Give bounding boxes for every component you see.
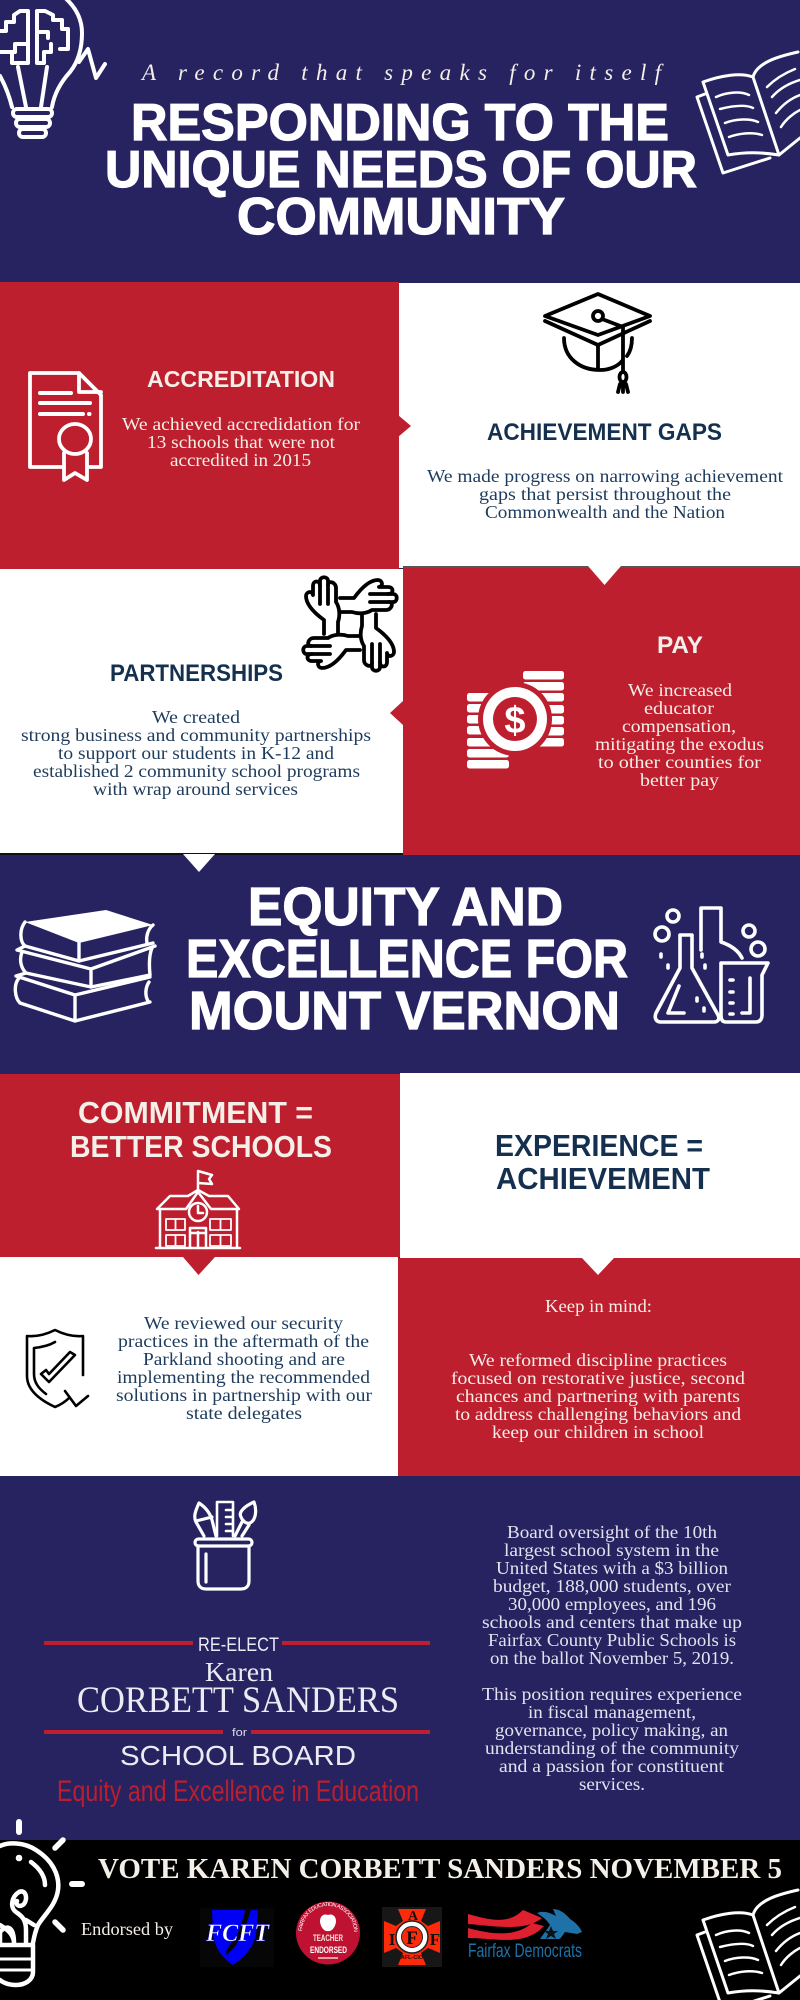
text: accreditation body: 13 schools that were not [147,432,335,452]
text: achievement gaps body [427,466,783,522]
icon: school building [156,1171,240,1248]
text: board oversight: on the ballot November 5, 2019. [490,1648,734,1668]
text: partnerships body: with wrap around services [93,779,298,799]
panel: header [0,0,800,284]
icon: open book footer [697,1890,800,2000]
text: accreditation body: accredited in 2015 [170,450,311,470]
arrow: commitment pointer [183,1257,215,1275]
text: partnerships body: strong business and community partnerships [21,725,371,745]
heading: vote banner: VOTE KAREN CORBETT SANDERS NOVEMBER 5 [98,1853,782,1885]
logo: IAFF: A [408,1909,419,1924]
text: board oversight [482,1522,742,1668]
text: board oversight: largest school system in the [504,1540,719,1560]
text: pay body [595,680,764,790]
logo: teacher endorsed: TEACHER [313,1933,343,1943]
text: board oversight: schools and centers that make up [482,1612,742,1632]
text: discipline body: keep our children in school [492,1422,704,1442]
text: discipline body [451,1350,745,1442]
icon: shield with check [27,1330,88,1407]
text: accreditation body [122,414,360,470]
icon: stack of books [15,910,155,1021]
text: partnerships body [21,707,371,799]
logo: IAFF: I [389,1930,396,1949]
heading: commitment better schools: COMMITMENT = [78,1095,313,1130]
text: pay body: educator [644,698,714,718]
icon: coins with dollar sign [467,671,564,768]
panel: partnerships [0,569,403,855]
logo: re-elect lockup: RE-ELECT [198,1635,279,1656]
logo: FCFT [200,1908,274,1967]
icon: light bulb with brain [0,0,105,137]
icon: coins with dollar sign: $ [504,700,526,742]
heading: accreditation: ACCREDITATION [147,366,335,392]
logo: teacher endorsed: FAIRFAX EDUCATION ASSOCIATION [298,1902,358,1932]
text: board oversight: Fairfax County Public Schools is [488,1630,736,1650]
text: security body: We reviewed our security [144,1313,343,1333]
logo: IAFF: F [406,1928,418,1949]
text: endorsed by: Endorsed by [81,1919,173,1939]
panel: campaign section [0,1476,800,1840]
logo: re-elect lockup: CORBETT SANDERS [77,1680,399,1721]
icon: four joined hands [303,577,397,671]
panel: experience [400,1073,800,1258]
logo: re-elect lockup: for [232,1727,247,1739]
text: partnerships body: to support our students in K-12 and [58,743,334,763]
icon: open book [697,52,800,173]
title: UNIQUE NEEDS OF OUR [105,141,697,199]
tagline: A record that speaks for itself [140,60,665,85]
heading: experience achievement [495,1128,710,1196]
text: board oversight: budget, 188,000 students, over [493,1576,731,1596]
text: security body: implementing the recommended [117,1367,370,1387]
text: security body: practices in the aftermath of the [118,1331,369,1351]
logo: teacher endorsed: ENDORSED [310,1945,347,1955]
text: security body: state delegates [186,1403,302,1423]
icon: glowing light bulb [0,1822,82,1985]
logo: IAFF: AFL-CIO [401,1955,424,1961]
panel: pay [390,566,800,856]
text: position requirements: services. [579,1774,645,1794]
arrow: experience pointer [582,1258,614,1275]
text: board oversight: 30,000 employees, and 196 [508,1594,716,1614]
text: keep in mind: Keep in mind: [545,1296,652,1316]
logo: FCFT: FCFT [205,1920,271,1947]
text: partnerships body: We created [152,707,240,727]
text: discipline body: focused on restorative justice, second [451,1368,745,1388]
heading: pay: PAY [657,632,703,659]
text: position requirements: This position requires experience [482,1684,742,1704]
text: discipline body: chances and partnering with parents [456,1386,740,1406]
panel: achievement gaps [398,283,800,568]
text: pay body: better pay [640,770,719,790]
text: partnerships body: established 2 community school programs [33,761,360,781]
arrow: pay pointer [390,701,403,725]
title: COMMUNITY [237,188,565,246]
panel: footer [0,1819,800,2000]
title: RESPONDING TO THE [131,94,669,152]
heading: equity and excellence: EQUITY AND [248,877,563,937]
heading: commitment better schools [70,1095,332,1164]
text: security body [116,1313,372,1423]
arrow: accreditation pointer [398,415,411,437]
text: board oversight: United States with a $3 billion [496,1558,728,1578]
panel: keep in mind [398,1258,800,1476]
heading: equity and excellence: EXCELLENCE FOR [186,929,628,989]
text: discipline body: We reformed discipline practices [469,1350,727,1370]
text: discipline body: to address challenging behaviors and [455,1404,741,1424]
text: pay body: compensation, [622,716,736,736]
text: security body: solutions in partnership with our [116,1385,372,1405]
logo: re-elect lockup: SCHOOL BOARD [120,1740,356,1771]
heading: equity and excellence [186,877,628,1041]
logo: IAFF: F [430,1930,440,1949]
heading: experience achievement: ACHIEVEMENT [496,1161,710,1196]
arrow: achievement gaps pointer [588,566,621,585]
heading: equity and excellence: MOUNT VERNON [189,981,620,1041]
text: position requirements [482,1684,742,1794]
text: achievement gaps body: gaps that persist throughout the [479,484,731,504]
title [105,94,697,246]
panel: security [0,1257,398,1476]
text: position requirements: in fiscal management, [528,1702,696,1722]
text: achievement gaps body: We made progress on narrowing achievement [427,466,783,486]
heading: commitment better schools: BETTER SCHOOLS [70,1129,332,1164]
heading: experience achievement: EXPERIENCE = [495,1128,703,1163]
text: pay body: mitigating the exodus [595,734,764,754]
icon: pencil cup [195,1502,256,1589]
icon: certificate [30,373,101,480]
logo: re-elect lockup: Karen [205,1657,274,1687]
text: position requirements: understanding of the community [485,1738,739,1758]
logo: re-elect lockup [44,1635,430,1808]
text: position requirements: governance, policy making, an [495,1720,728,1740]
logo: Fairfax Democrats: Fairfax Democrats [468,1941,582,1962]
logo: teacher endorsed [296,1902,360,1964]
panel: equity and excellence banner [0,854,800,1074]
text: board oversight: Board oversight of the 10th [507,1522,717,1542]
logo: Fairfax Democrats [468,1909,582,1962]
text: achievement gaps body: Commonwealth and the Nation [485,502,725,522]
text: security body: Parkland shooting and are [143,1349,345,1369]
logo: re-elect lockup: Equity and Excellence in Education [57,1775,419,1808]
text: pay body: We increased [628,680,732,700]
heading: partnerships: PARTNERSHIPS [110,660,283,687]
logo: IAFF [382,1907,442,1967]
arrow: partnerships pointer [183,854,215,872]
heading: achievement gaps: ACHIEVEMENT GAPS [487,419,722,446]
icon: lab flasks [655,908,768,1022]
text: accreditation body: We achieved accredidation for [122,414,360,434]
text: position requirements: and a passion for constituent [499,1756,724,1776]
panel: commitment [0,1074,400,1257]
icon: graduation cap [545,294,650,392]
panel: accreditation [0,282,399,569]
text: pay body: to other counties for [598,752,761,772]
